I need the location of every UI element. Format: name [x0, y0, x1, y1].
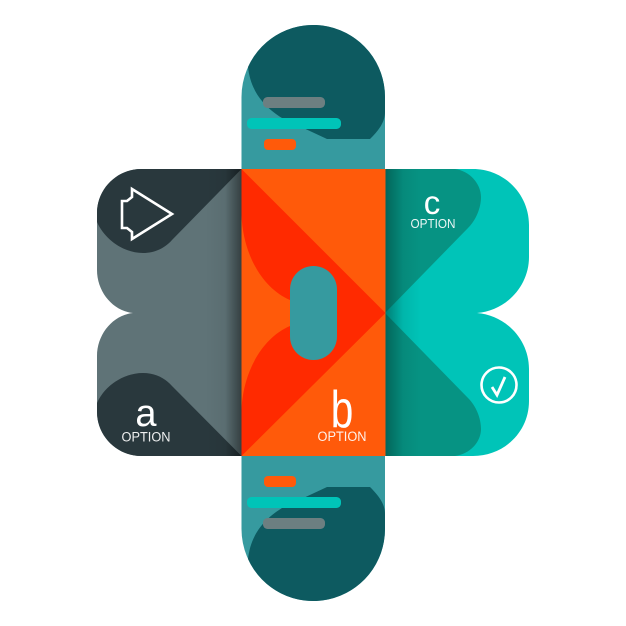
label: a option [122, 393, 170, 444]
top tab teal bar [247, 118, 341, 129]
left dark blob top [97, 169, 242, 253]
icon: check circle [482, 368, 516, 402]
panel: right option c [385, 169, 529, 456]
label: c option: OPTION [410, 217, 456, 231]
left fold shadow [205, 169, 242, 456]
label: a option: OPTION [122, 430, 170, 444]
panel: bottom tab [242, 456, 385, 601]
left dark blob bottom [97, 373, 242, 456]
top tab orange bar [264, 139, 296, 150]
right fold shadow [385, 169, 421, 456]
right dark blob top [385, 169, 481, 313]
label: b option [318, 380, 366, 444]
top tab grey bar [263, 97, 325, 108]
bottom tab dark cap [248, 487, 385, 601]
top tab dark cap [248, 25, 385, 139]
label: c option: c [424, 184, 440, 221]
label: b option: b [331, 380, 353, 438]
label: b option: OPTION [318, 429, 366, 444]
center teal pill [290, 266, 337, 360]
panel: left option a [97, 169, 242, 456]
label: c option [410, 184, 456, 231]
bottom tab grey bar [263, 518, 325, 529]
center red shape [242, 169, 386, 456]
bottom tab orange bar [264, 476, 296, 487]
right dark blob bottom [385, 313, 481, 456]
icon: arrow [122, 189, 172, 239]
bottom tab teal bar [247, 497, 341, 508]
label: a option: a [135, 393, 157, 435]
panel: top tab [242, 25, 385, 170]
panel: center option b [242, 169, 386, 456]
